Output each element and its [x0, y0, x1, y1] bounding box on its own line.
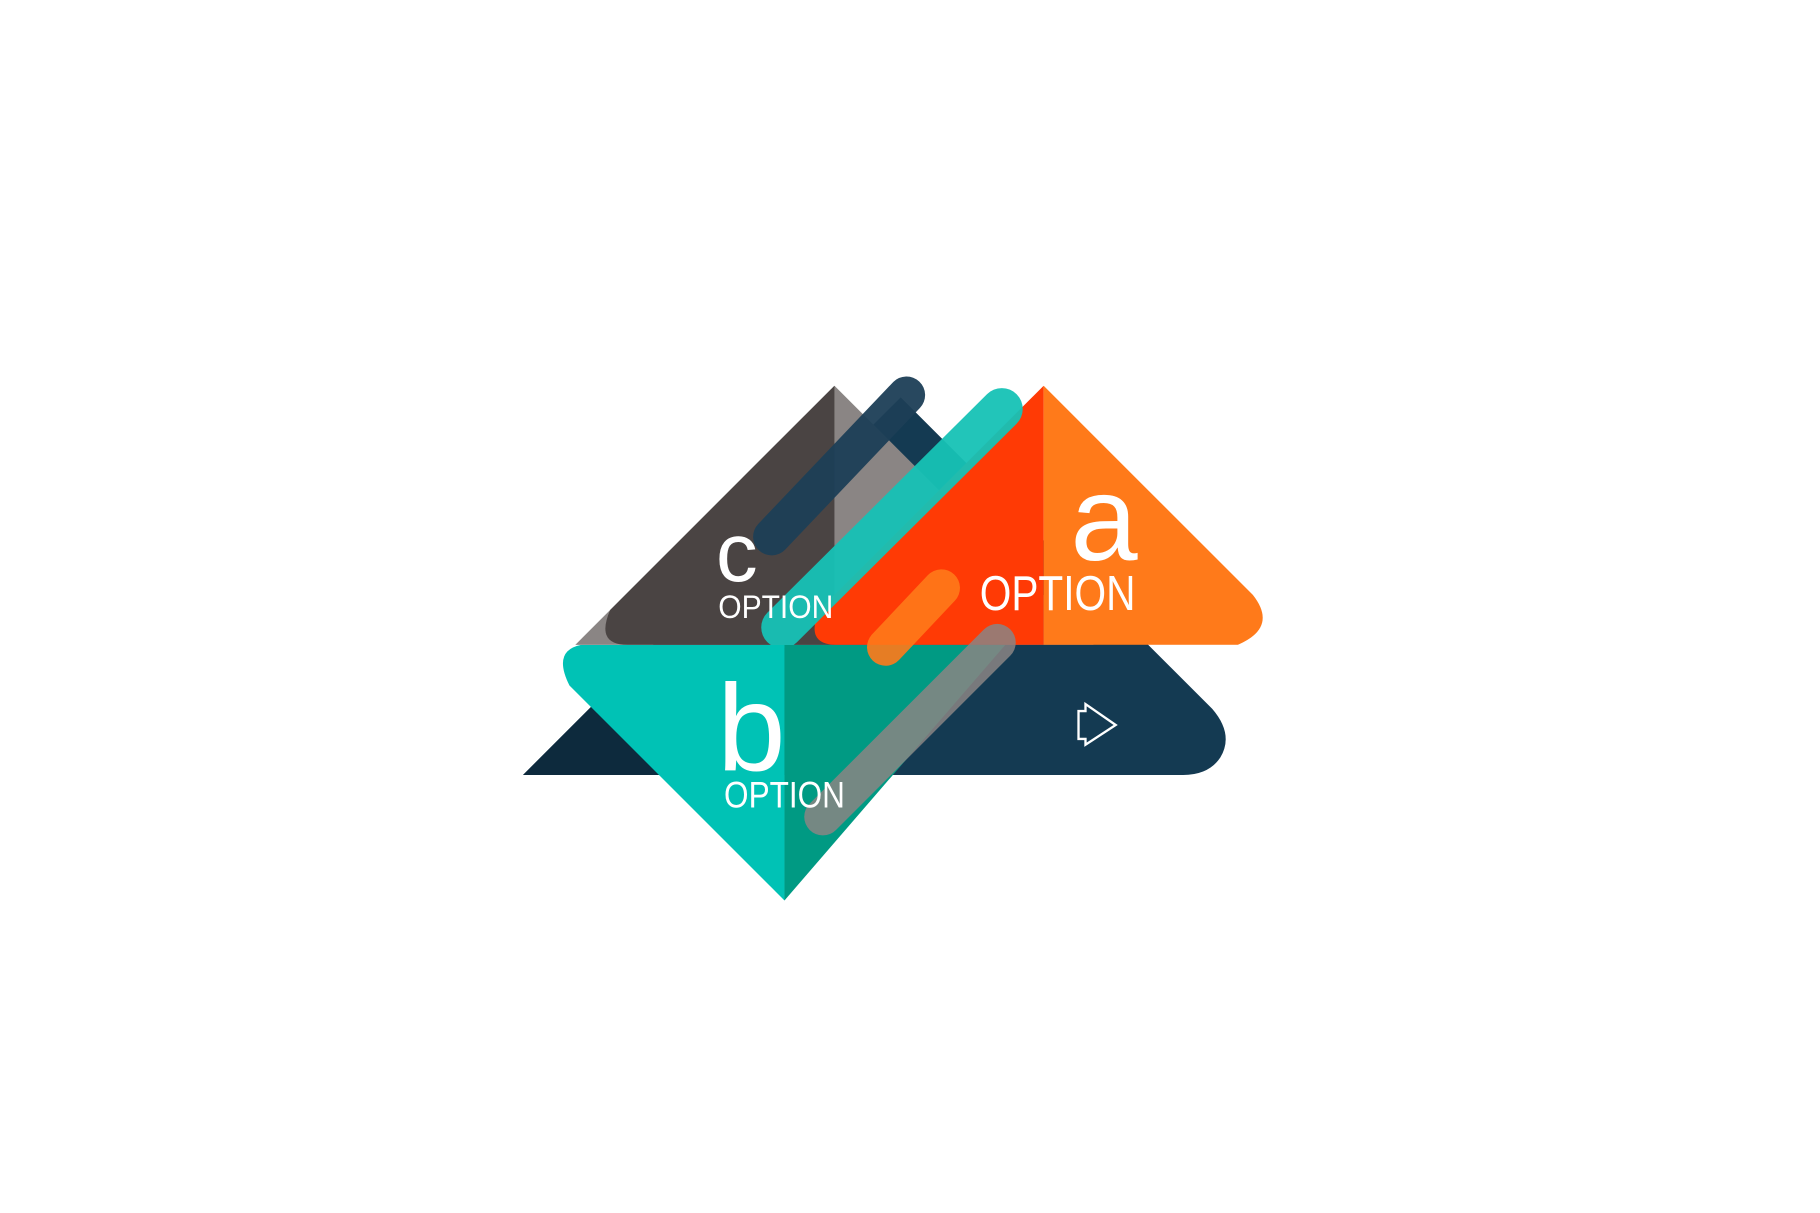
icon: arrow [1079, 704, 1116, 745]
teal triangle: option b [552, 588, 1011, 906]
infographic [523, 376, 1263, 900]
gray triangle: option c [575, 383, 1102, 651]
navy triangle (arrow panel) [523, 397, 1226, 775]
orange bar [886, 588, 941, 647]
letter b: b [717, 659, 786, 797]
gray bar [823, 643, 997, 817]
letter a: a [1070, 451, 1138, 586]
navy bar [772, 395, 907, 537]
label OPTION a: OPTION [980, 567, 1135, 621]
letter c: c [716, 505, 758, 599]
label OPTION c: OPTION [718, 589, 833, 625]
label OPTION b: OPTION [724, 774, 845, 816]
orange triangle: option a [782, 383, 1311, 651]
teal bar [782, 409, 1002, 627]
